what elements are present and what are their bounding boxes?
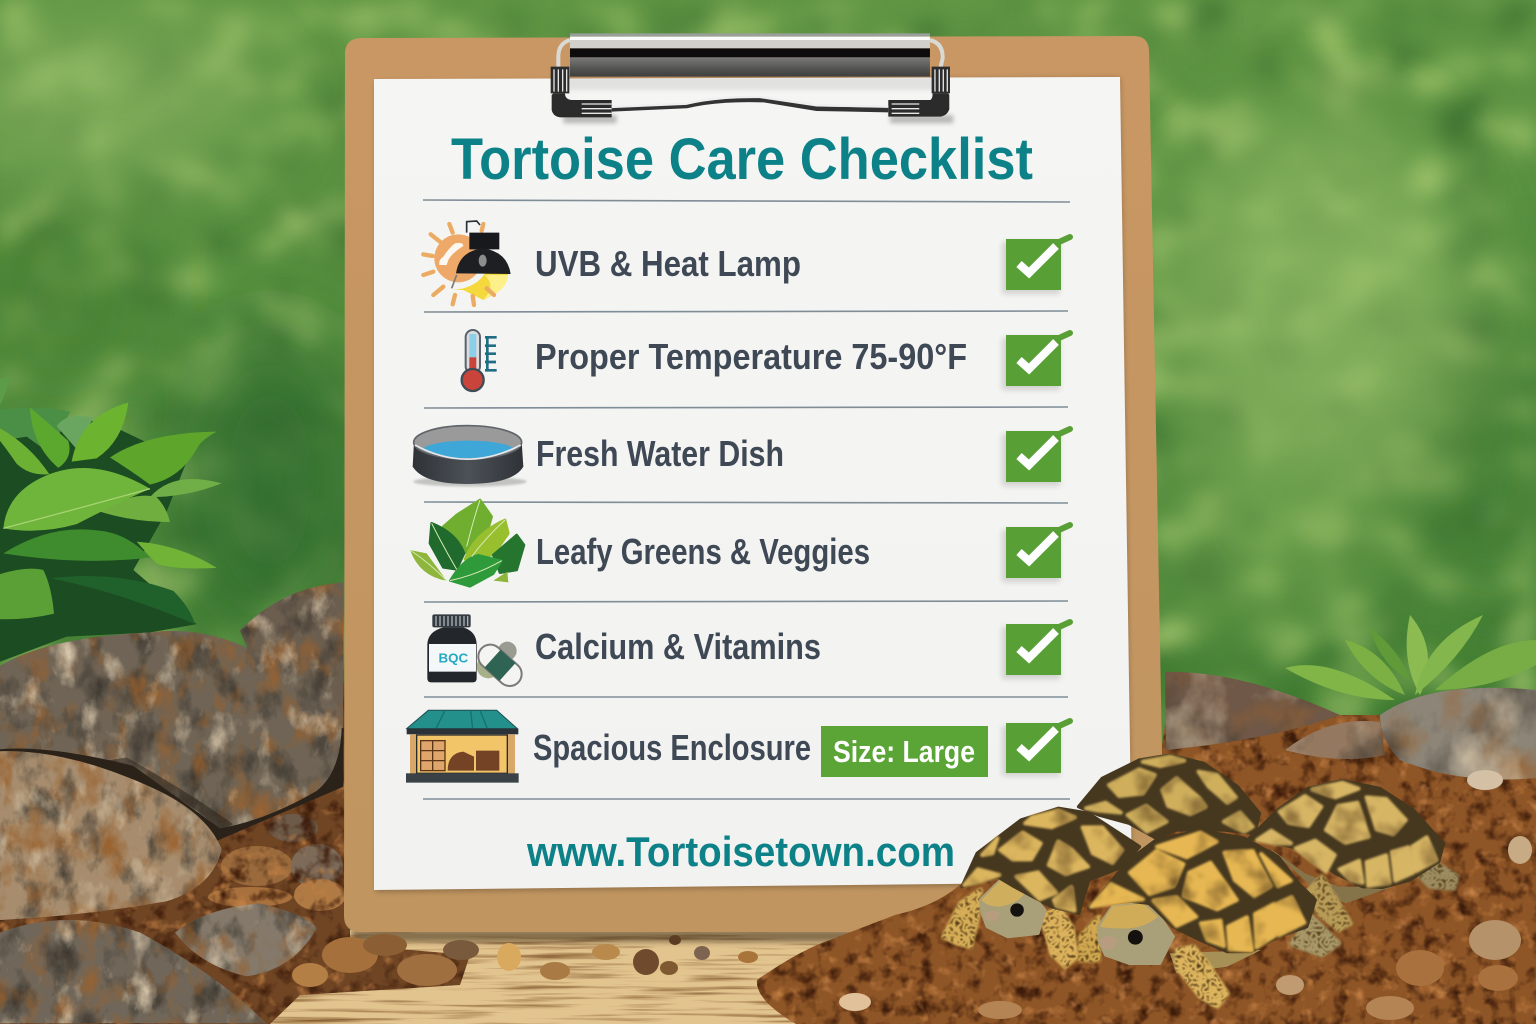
row: Leafy Greens & Veggies xyxy=(410,500,1070,587)
label: UVB & Heat Lamp xyxy=(535,243,801,284)
row: Fresh Water Dish xyxy=(413,426,1070,487)
row: Spacious Enclosure xyxy=(406,710,1070,783)
tortoise: left xyxy=(943,808,1139,967)
tortoises xyxy=(943,755,1457,1007)
divider lines xyxy=(423,200,1070,799)
rocks: right xyxy=(1165,672,1536,780)
icon: heat lamp with sun xyxy=(423,221,511,305)
label: Spacious Enclosure xyxy=(533,727,811,768)
paper sheet xyxy=(374,77,1132,892)
icon: supplement bottle and pill xyxy=(427,614,527,691)
soil behind clipboard xyxy=(0,680,1536,1024)
clipboard xyxy=(344,33,1165,942)
icon: supplement bottle and pill: BQC xyxy=(439,651,469,666)
check box xyxy=(1002,721,1070,776)
wooden ledge xyxy=(250,930,900,1024)
tortoise: right xyxy=(1249,781,1457,930)
check box xyxy=(1002,429,1070,486)
website url: www.Tortoisetown.com xyxy=(526,828,955,875)
icon: enclosure xyxy=(406,710,519,783)
label: Proper Temperature 75-90°F xyxy=(535,336,967,377)
label: Fresh Water Dish xyxy=(536,433,784,474)
soil mound over clipboard corner xyxy=(757,860,1536,1024)
clip: metal binder xyxy=(551,33,953,123)
check box xyxy=(1002,622,1070,679)
row: Calcium & Vitamins xyxy=(427,614,1070,691)
check box xyxy=(1002,237,1070,294)
row: UVB & Heat Lamp xyxy=(423,221,1070,305)
badge: size large xyxy=(821,726,988,777)
check box xyxy=(1002,525,1070,582)
icon: leafy greens xyxy=(410,500,524,587)
pebbles on ledge and soil xyxy=(292,770,1532,1020)
icon: thermometer xyxy=(462,330,497,391)
label: Calcium & Vitamins xyxy=(535,626,821,667)
row: Proper Temperature xyxy=(462,330,1070,391)
plant: right foliage xyxy=(1285,615,1536,700)
badge: size large: Size: Large xyxy=(833,734,975,769)
tortoise: front xyxy=(1080,831,1339,1007)
tortoise: back xyxy=(1079,755,1259,838)
label: Leafy Greens & Veggies xyxy=(536,531,870,572)
plant: left foliage xyxy=(0,378,222,662)
check box xyxy=(1002,333,1070,390)
title: Tortoise Care Checklist xyxy=(451,127,1033,192)
icon: water dish xyxy=(413,426,527,487)
rocks: left pile xyxy=(0,583,343,1023)
